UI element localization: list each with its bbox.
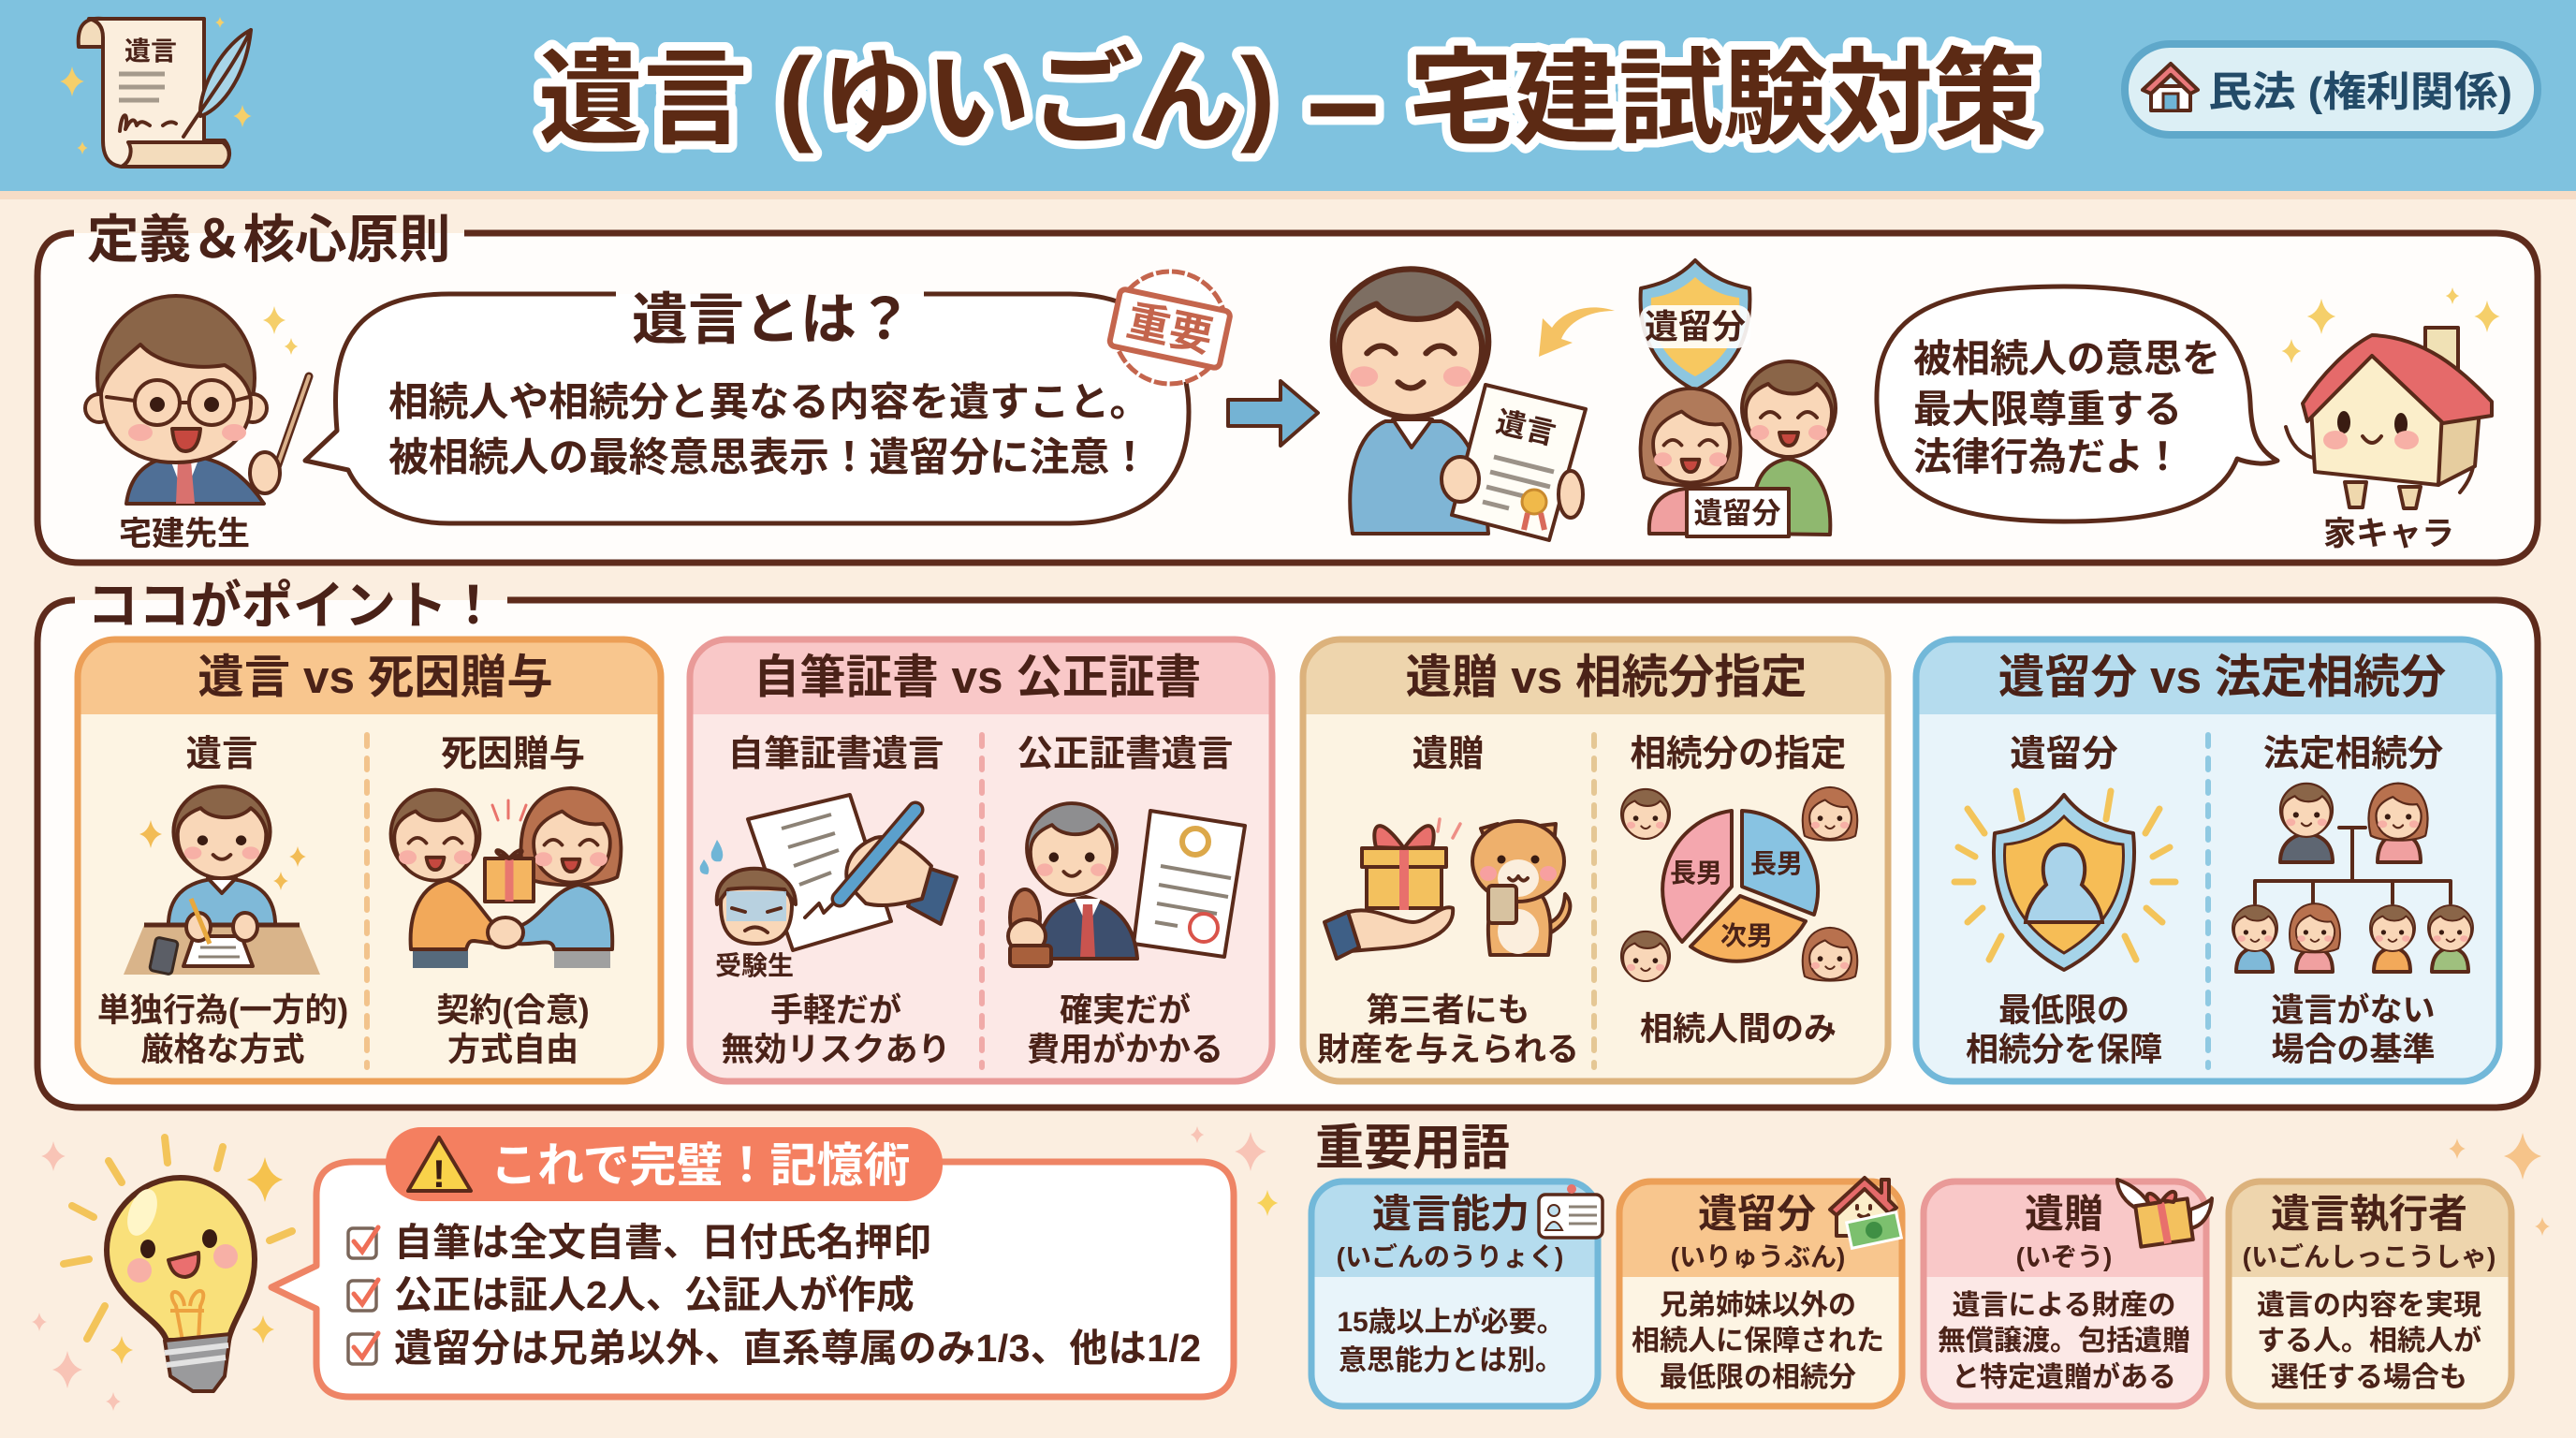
speech bubble: house character — [1877, 286, 2277, 521]
caption: reserved share — [1966, 992, 2162, 1068]
term name: 遺留分 — [1698, 1192, 1816, 1236]
column label: bequest: 遺贈 — [1412, 734, 1485, 774]
bubble text: 法律行為だよ！ — [1913, 435, 2182, 478]
column label: death gift: 死因贈与 — [441, 734, 585, 774]
card heading: 遺贈 vs 相続分指定 — [1405, 652, 1808, 703]
caption: holographic — [721, 992, 951, 1068]
definition text: 被相続人の最終意思表示！遺留分に注意！ — [388, 435, 1149, 480]
bubble heading: 遺言とは？ — [632, 288, 913, 351]
title: 宅建試験対策 — [1409, 40, 2038, 157]
icon: will scroll with quill — [60, 17, 252, 167]
icon: house with money — [1830, 1178, 1901, 1248]
illustration: gift and dog — [1325, 819, 1570, 959]
will document: 遺言 — [1493, 404, 1559, 451]
definition text: 相続人や相続分と異なる内容を遺すこと。 — [388, 380, 1149, 425]
caption: statutory share — [2271, 992, 2436, 1068]
title: ゆいごん — [821, 40, 1240, 157]
caption: death gift: 方式自由 — [447, 1032, 578, 1068]
term description: 15歳以上が必要。 — [1337, 1306, 1565, 1338]
bubble text — [1913, 337, 2220, 478]
term card: reserved share — [1619, 1178, 1902, 1406]
caption: notarized: 確実だが — [1060, 992, 1191, 1029]
term reading: (いごんのうりょく) — [1337, 1241, 1563, 1271]
card: bequest vs share designation — [1303, 639, 1888, 1081]
stamp: important — [1104, 261, 1237, 394]
icon: protective shield — [1954, 791, 2175, 970]
stamp: important: 重要 — [1122, 296, 1217, 361]
card: reserved vs statutory share — [1916, 639, 2499, 1081]
title: ( — [779, 37, 814, 154]
card heading: 遺留分 vs 法定相続分 — [1998, 652, 2446, 703]
term description: 最低限の相続分 — [1660, 1362, 1856, 1393]
column label: notarized: 公正証書遺言 — [1017, 734, 1234, 774]
icon: winged gift — [2117, 1180, 2212, 1247]
term description — [1632, 1290, 1884, 1393]
caption: will: 単独行為(一方的) — [97, 992, 348, 1029]
caption: holographic: 手軽だが — [770, 992, 901, 1029]
bubble text: 被相続人の意思を — [1913, 337, 2220, 380]
card: holographic vs notarized — [690, 639, 1272, 1081]
chart: inheritance share pie — [1621, 787, 1857, 981]
sign: reserved share: 遺留分 — [1694, 497, 1780, 530]
caption: will: 厳格な方式 — [140, 1032, 305, 1068]
caption: bequest: 財産を与えられる — [1317, 1032, 1579, 1068]
illustration: hand writing and worried student — [700, 795, 957, 950]
icon: shield: 遺留分 — [1645, 307, 1746, 345]
chart: inheritance share pie: 長男 — [1750, 849, 1803, 878]
caption: notarized: 費用がかかる — [1027, 1032, 1223, 1068]
definition text — [388, 380, 1149, 480]
card heading: 自筆証書 vs 公正証書 — [754, 652, 1201, 703]
label: student: 受験生 — [715, 951, 794, 980]
label: house character: 家キャラ — [2323, 516, 2454, 552]
mnemonic line 3: 遺留分は兄弟以外、直系尊属のみ1/3、他は1/2 — [394, 1327, 1201, 1370]
column label: will: 遺言 — [185, 734, 258, 774]
panel: key points — [37, 577, 2538, 1108]
term description: と特定遺贈がある — [1952, 1361, 2176, 1393]
caption: statutory share: 場合の基準 — [2271, 1032, 2436, 1068]
term description: 相続人に保障された — [1632, 1326, 1884, 1357]
title — [538, 26, 2038, 173]
will document — [1452, 385, 1586, 540]
term description — [1938, 1290, 2190, 1393]
icon: warning: ! — [432, 1152, 446, 1196]
caption: holographic: 無効リスクあり — [721, 1032, 951, 1068]
panel: definition and core principle — [37, 211, 2538, 563]
term card: executor — [2229, 1181, 2511, 1406]
caption: will — [97, 992, 348, 1068]
term description: 遺言による財産の — [1952, 1290, 2176, 1321]
arrow: to heirs — [1228, 381, 1318, 446]
header band — [0, 0, 2576, 199]
term name: 遺言能力 — [1372, 1192, 1530, 1236]
term reading: (いぞう) — [2016, 1242, 2112, 1271]
icon: shield — [1640, 260, 1750, 390]
caption: notarized — [1027, 992, 1223, 1068]
chart: inheritance share pie: 次男 — [1720, 921, 1773, 950]
term reading: (いごんしっこうしゃ) — [2243, 1241, 2496, 1271]
mnemonic heading tag: これで完璧！記憶術 — [490, 1139, 910, 1192]
category badge — [2125, 44, 2538, 135]
mnemonic line 1: 自筆は全文自書、日付氏名押印 — [394, 1221, 931, 1264]
title: ) — [1240, 37, 1275, 154]
sign: reserved share — [1687, 489, 1789, 536]
panel: mnemonic — [271, 1127, 1234, 1397]
heading: definition: 定義＆核心原則 — [87, 211, 451, 269]
heading: key terms: 重要用語 — [1315, 1122, 1510, 1176]
label: teacher: 宅建先生 — [119, 516, 250, 552]
illustration: handshake with gift — [391, 788, 621, 968]
illustration: heirs with sign — [1641, 361, 1836, 536]
term description — [1337, 1306, 1565, 1376]
arrow: curved orange — [1539, 307, 1615, 357]
column label: holographic: 自筆証書遺言 — [727, 734, 944, 774]
caption: bequest — [1317, 992, 1579, 1068]
character: light bulb — [32, 1137, 292, 1411]
mnemonic heading tag — [386, 1127, 943, 1201]
term name: 遺贈 — [2025, 1192, 2103, 1236]
term card: testamentary capacity — [1311, 1181, 1603, 1406]
illustration: testator holding will — [1333, 269, 1586, 540]
caption: statutory share: 遺言がない — [2271, 992, 2436, 1029]
chart: inheritance share pie: 長男 — [1670, 858, 1722, 888]
icon: will scroll with quill: 遺言 — [124, 37, 177, 66]
term description: する人。相続人が — [2257, 1325, 2481, 1357]
illustration: notary with certificate — [1008, 803, 1245, 966]
illustration: person writing will — [124, 786, 320, 975]
heading: key points: ココがポイント！ — [87, 577, 499, 635]
column label: statutory share: 法定相続分 — [2263, 734, 2443, 774]
caption: reserved share: 最低限の — [1998, 992, 2130, 1029]
term card: bequest — [1924, 1180, 2212, 1406]
icon: warning — [408, 1137, 471, 1196]
character: house — [2282, 287, 2500, 508]
term description: 意思能力とは別。 — [1339, 1345, 1563, 1376]
title: 遺言 — [538, 40, 748, 157]
term description: 無償譲渡。包括遺贈 — [1938, 1326, 2190, 1357]
character: teacher — [85, 296, 309, 504]
bubble text: 最大限尊重する — [1913, 388, 2182, 431]
icon: id card — [1539, 1184, 1603, 1238]
term description: 遺言の内容を実現 — [2257, 1290, 2481, 1321]
caption: bequest: 第三者にも — [1366, 992, 1530, 1029]
term description: 選任する場合も — [2271, 1362, 2467, 1393]
column label: reserved share: 遺留分 — [2010, 734, 2118, 774]
column label: share designation: 相続分の指定 — [1630, 734, 1847, 774]
term name: 遺言執行者 — [2271, 1192, 2467, 1236]
term description: 兄弟姉妹以外の — [1660, 1290, 1856, 1321]
card: will vs death gift — [78, 639, 661, 1081]
term reading: (いりゅうぶん) — [1671, 1242, 1845, 1271]
title: – — [1307, 26, 1380, 173]
caption: reserved share: 相続分を保障 — [1966, 1032, 2162, 1068]
caption: share designation: 相続人間のみ — [1640, 1011, 1837, 1048]
decorative sparkles — [1191, 1126, 2550, 1236]
mnemonic line 2: 公正は証人2人、公証人が作成 — [394, 1273, 915, 1316]
icon: house — [2143, 64, 2198, 110]
badge label: 民法 (権利関係) — [2208, 69, 2512, 115]
speech bubble: what is a will — [305, 288, 1189, 523]
term description — [2257, 1290, 2481, 1393]
card heading: 遺言 vs 死因贈与 — [198, 652, 553, 703]
caption: death gift: 契約(合意) — [436, 992, 590, 1029]
diagram: family tree — [2232, 784, 2473, 972]
caption: death gift — [436, 992, 590, 1068]
